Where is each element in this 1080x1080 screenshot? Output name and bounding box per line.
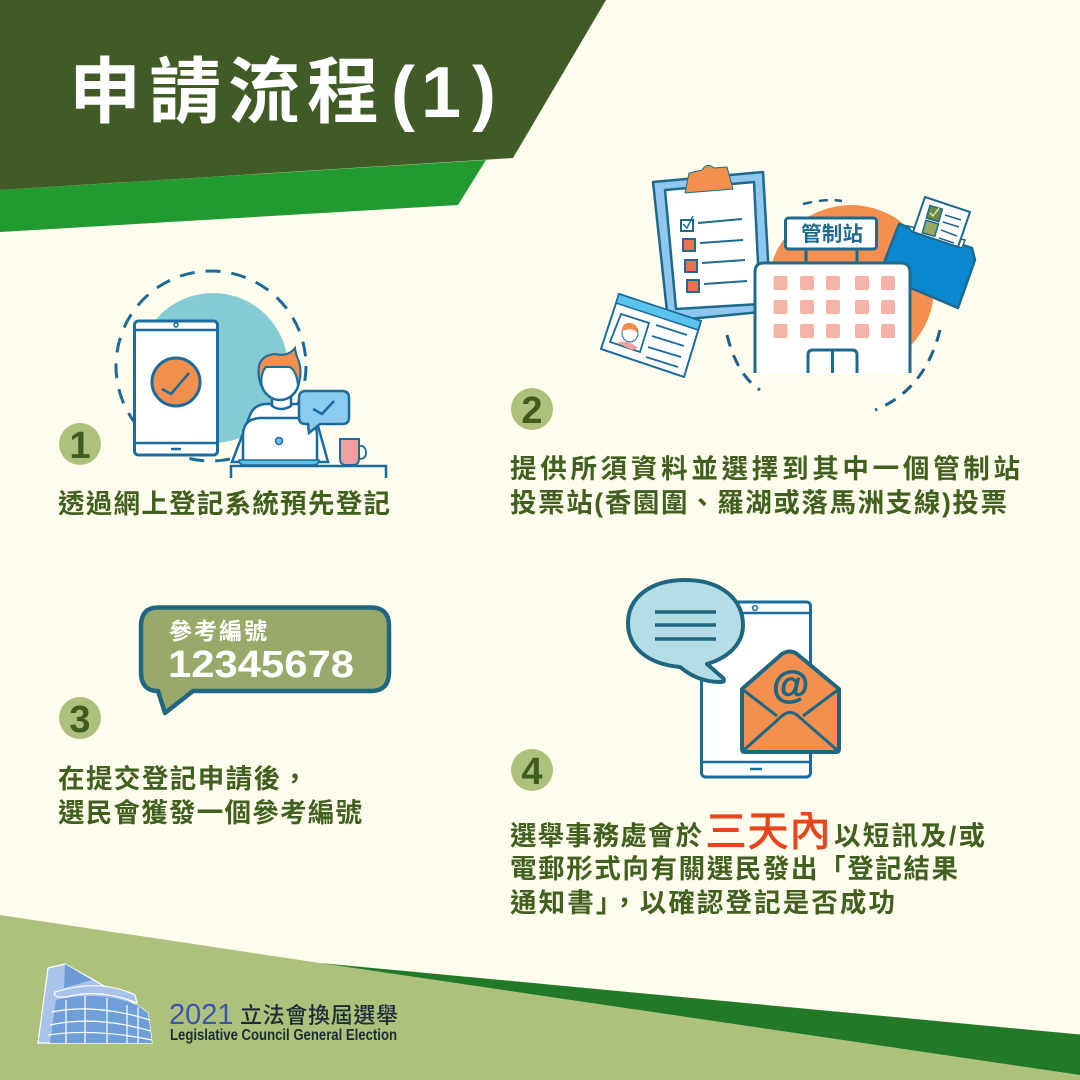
step 4 text: 通知書」，以確認登記是否成功 [510, 888, 895, 918]
clipboard [653, 165, 771, 321]
step 3 number: 3 [69, 699, 91, 741]
step 1 number [59, 423, 101, 467]
id card [601, 294, 701, 377]
envelope: @ [771, 665, 809, 707]
logo: legislative council building [38, 964, 152, 1043]
step 1 text: 透過網上登記系統預先登記 [58, 489, 390, 519]
step 4 text: 選舉事務處會於 [510, 821, 702, 851]
tablet [702, 602, 810, 777]
step 4 number [511, 749, 553, 793]
ballot box [880, 197, 975, 308]
logo text: 立法會換屆選舉 [240, 1003, 398, 1028]
step 2 number [511, 388, 553, 432]
footer band [0, 915, 1080, 1080]
step 3 text: 在提交登記申請後， [58, 764, 308, 794]
step 3 text [58, 764, 362, 828]
step 2 number: 2 [521, 390, 543, 432]
step 3 text: 選民會獲發一個參考編號 [58, 798, 362, 828]
step 4 text: 三天內 [705, 808, 831, 855]
step 4 text: 電郵形式向有關選民發出「登記結果 [510, 854, 958, 884]
speech bubble [628, 580, 743, 682]
illustration: step 2 polling station [601, 165, 975, 410]
header banner [0, 0, 606, 232]
logo text: 2021 [169, 999, 234, 1031]
step 4 number: 4 [521, 751, 543, 793]
reference number speech bubble: 參考編號 [169, 618, 267, 644]
step 1 number: 1 [69, 425, 91, 467]
logo text [169, 999, 398, 1044]
step 4 text [510, 808, 985, 918]
illustration: step 1 person registering online [116, 271, 386, 478]
building [755, 218, 910, 374]
step 2 text: 提供所須資料並選擇到其中一個管制站 [510, 454, 1020, 484]
step 3 number [59, 697, 101, 741]
reference number speech bubble: 12345678 [168, 644, 354, 686]
logo text: Legislative Council General Election [170, 1027, 397, 1044]
illustration: step 4 tablet and email [628, 580, 839, 777]
step 4 text: 以短訊及/或 [834, 821, 985, 851]
step 2 text [510, 454, 1020, 518]
reference number speech bubble [141, 608, 389, 713]
step 2 text: 投票站(香園圍、羅湖或落馬洲支線)投票 [510, 488, 1007, 518]
title: 申請流程(1) [69, 53, 496, 133]
building: 管制站 [801, 222, 863, 246]
envelope [742, 652, 839, 752]
